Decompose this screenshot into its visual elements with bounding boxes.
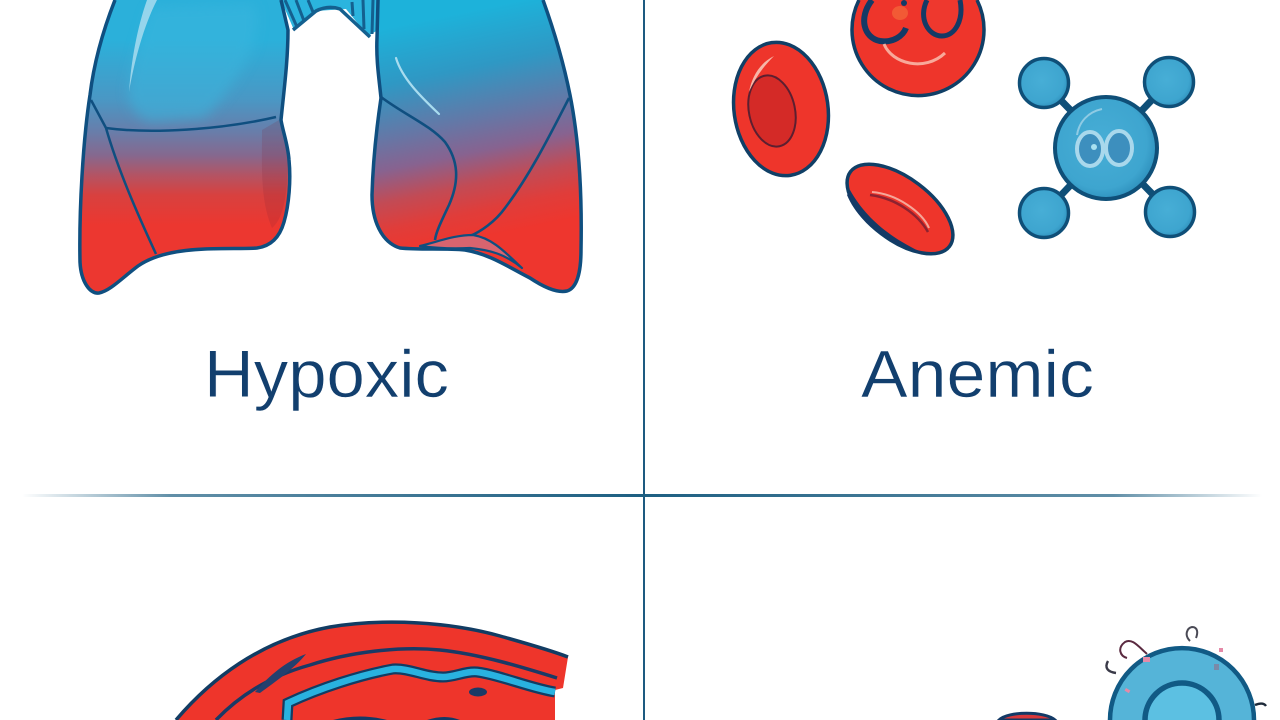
right lung [372,0,581,291]
shading [262,120,288,228]
outline [372,0,581,291]
bronchi [281,0,378,37]
panel: circulatory (cropped) [176,622,568,720]
left lung [80,0,290,293]
icon: red blood cell with CO [852,0,984,96]
lobe lines [381,97,569,240]
receptors [1120,641,1147,658]
icon: red blood cell, oval [725,36,837,182]
highlight [396,58,439,114]
icon: small red cell [999,713,1055,720]
icon: heart / vessel section [176,622,568,720]
icon: red blood cell, side view [832,147,968,271]
label: Hypoxic: Hypoxic [204,337,449,412]
icon: carbon monoxide molecule [1020,58,1194,238]
icon: blue cell [1106,627,1266,720]
highlight [129,0,157,92]
outline [80,0,290,293]
label: Anemic: Anemic [861,337,1094,412]
divider: vertical [643,0,645,720]
panel: hypoxic [80,0,581,412]
divider: horizontal [22,494,1262,497]
panel: histotoxic (cropped) [999,627,1266,720]
icon: lungs [80,0,581,293]
lobe lines [91,100,276,254]
panel: anemic [725,0,1194,412]
